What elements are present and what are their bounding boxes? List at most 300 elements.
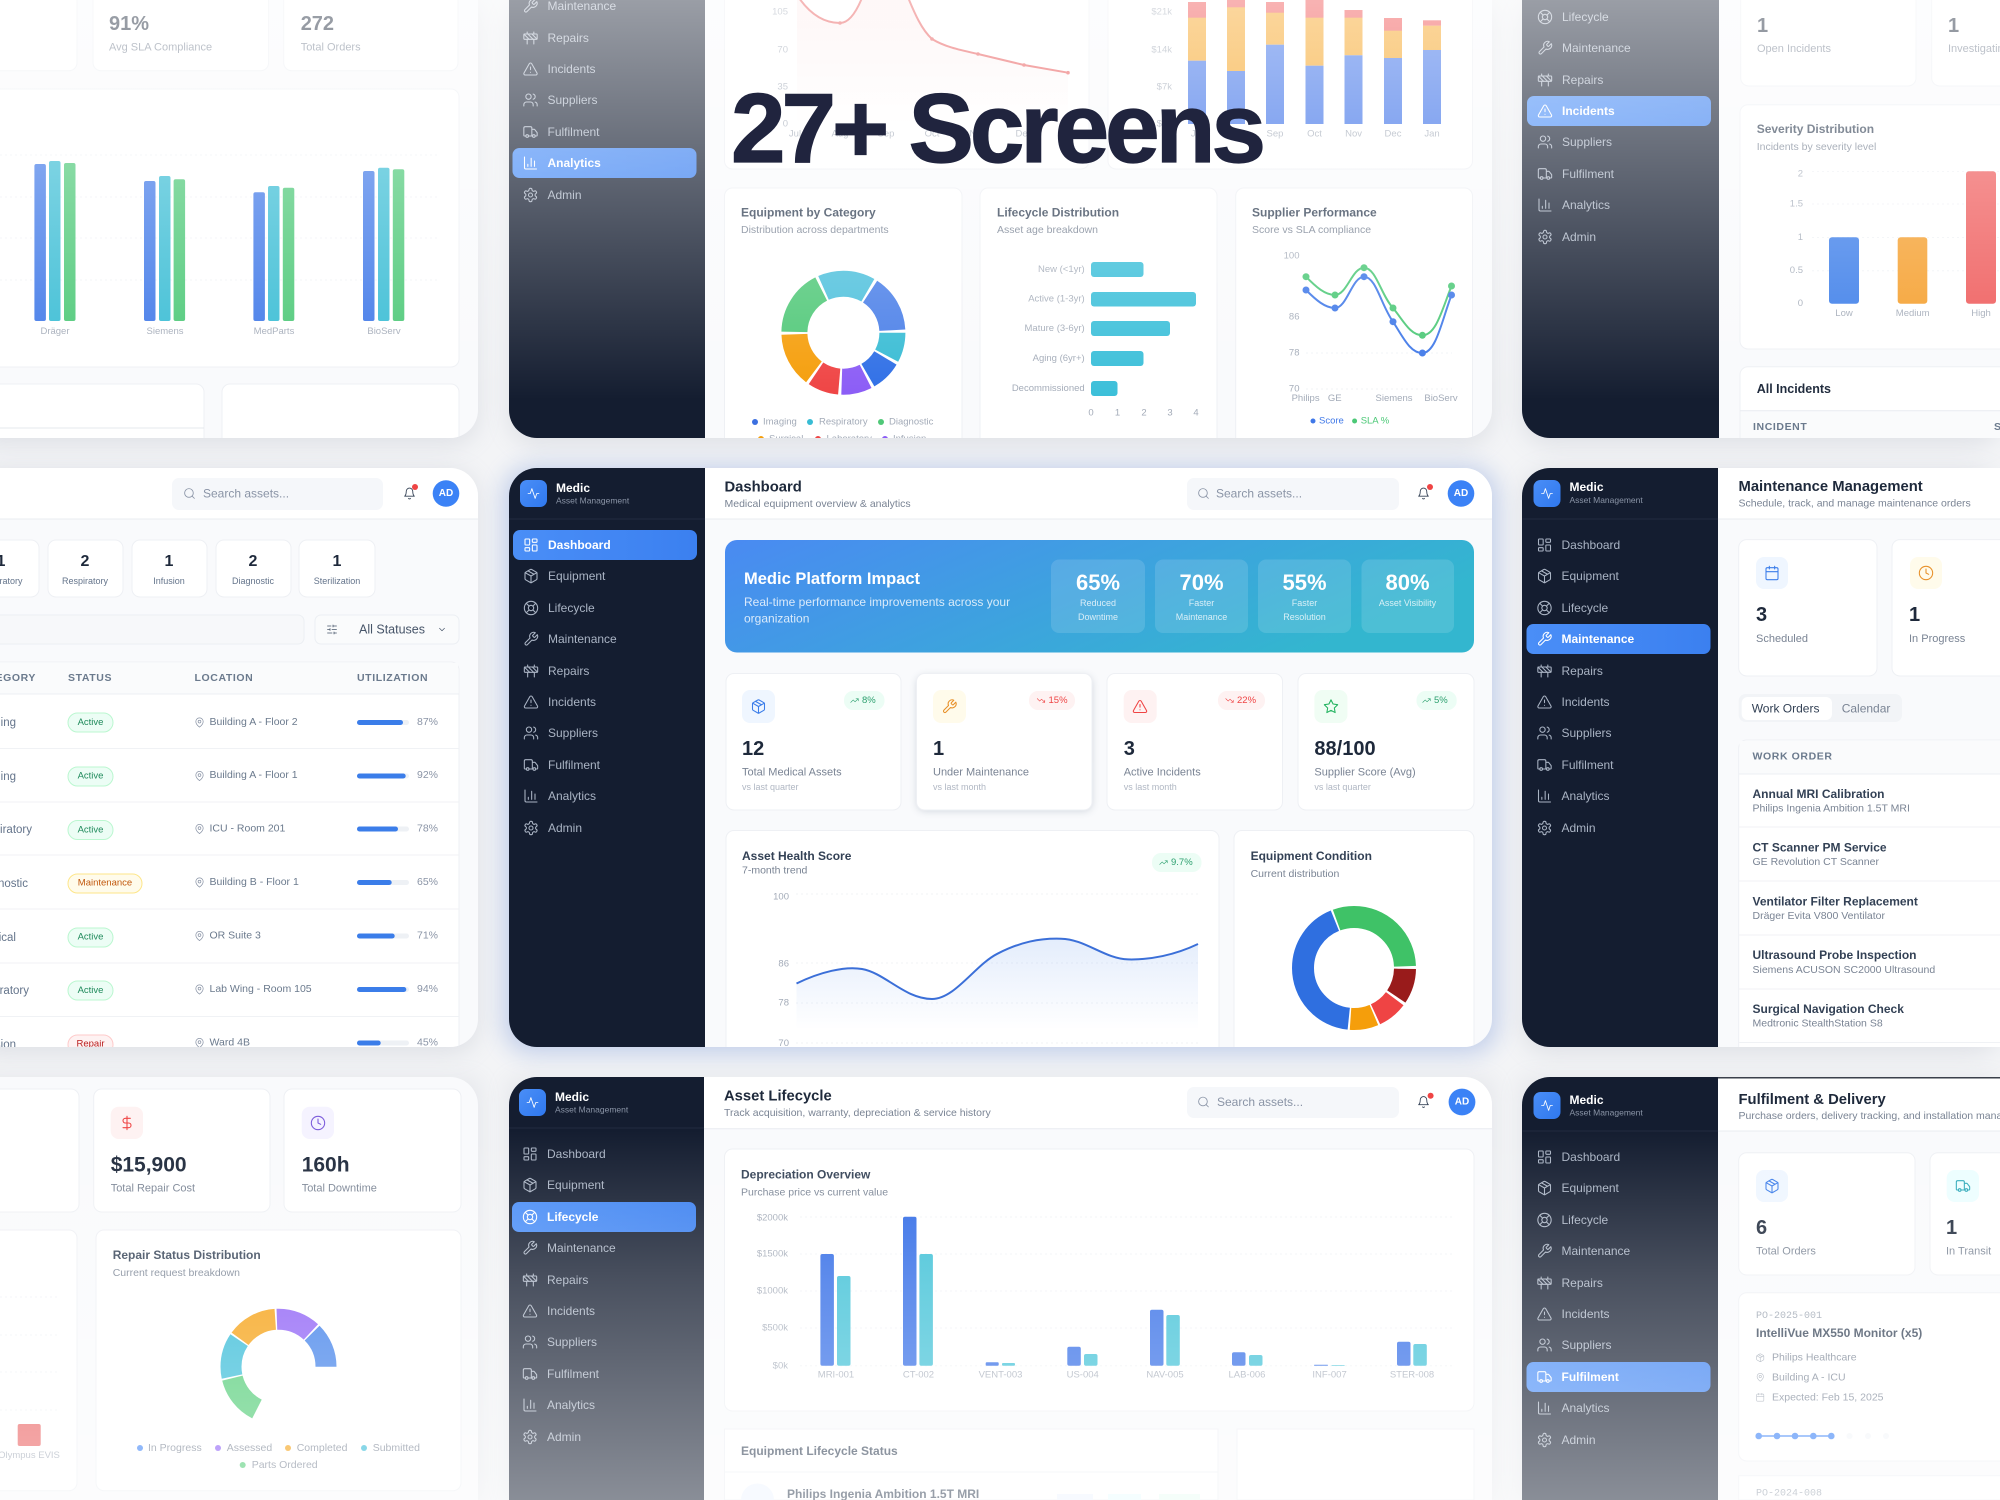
bar group: MedParts [253, 186, 295, 337]
row: Building A Floor 1 [0, 767, 438, 786]
chart panel: downtime trend: Dec [1016, 128, 1033, 140]
chart panel: Asset Health Score: 70 [778, 1038, 789, 1049]
order card: PO-2025-001: IntelliVue MX550 Monitor (x5) [1756, 1326, 1922, 1340]
chart panel: monthly cost stacked bars: Jul [1191, 128, 1203, 140]
order card: PO-2025-001 [1739, 1293, 2000, 1461]
chart panel: monthly cost stacked bars: $21k [1151, 6, 1172, 18]
stat card: In Progress: 1 [1909, 604, 1920, 626]
table: equipment assets: UTILIZATION [357, 672, 428, 684]
nav item: Dashboard active [513, 530, 697, 560]
stat card: Total Repair Cost: $15,900 [111, 1154, 187, 1176]
sidebar: maintenance active [1522, 480, 1718, 835]
chart panel: Depreciation Overview: Purchase price vs current value [741, 1187, 888, 1199]
chart panel: Severity Distribution: 0 [1798, 298, 1803, 309]
legend: equipment condition: Fair [1380, 1046, 1396, 1056]
row: Building A Floor 2: 87% [417, 716, 438, 728]
KPI: Active Incidents: vs last month [1124, 782, 1177, 792]
KPI: Active Incidents: 3 [1124, 738, 1135, 760]
logo [1534, 1092, 1643, 1119]
logo: Asset Management [555, 1104, 629, 1114]
donut chart: equipment by category [794, 284, 892, 382]
stat card: Scheduled [1739, 540, 1877, 676]
category chip: Sterilization: Sterilization [314, 576, 360, 586]
search box: Search assets... [1216, 486, 1302, 500]
stat card: Total Orders: 272 [301, 13, 334, 35]
nav item: Repairs [524, 31, 589, 45]
chart panel: monthly cost stacked bars: Aug [1228, 128, 1244, 140]
bar group: BioServ: BioServ [367, 326, 401, 337]
nav item: Equipment: Equipment [548, 569, 606, 583]
panel: analytics screen top left [0, 0, 478, 464]
row: OR Suite 3: OR Suite 3 [210, 930, 261, 942]
chart panel: Supplier Performance: SLA % [1361, 416, 1390, 426]
nav item: Dashboard: Dashboard [547, 1147, 606, 1161]
table: work orders: WORK ORDER [1752, 751, 1833, 763]
nav item: Fulfilment active: Fulfilment [1562, 1370, 1619, 1384]
nav item: Incidents [523, 1304, 595, 1318]
row: OR Suite 3: Active [78, 932, 103, 942]
nav item: Incidents [1538, 1307, 1610, 1321]
nav item: Fulfilment: Fulfilment [548, 125, 600, 139]
panel: repairs screen bottom left [0, 1077, 478, 1500]
nav item: Lifecycle [1538, 10, 1609, 24]
avatar: AD [1454, 488, 1468, 499]
chart panel: Equipment by Category [724, 208, 962, 438]
table panel: All Incidents: All Incidents [1757, 382, 1831, 396]
KPI: Active Incidents: Active Incidents [1124, 766, 1201, 778]
order card: PO-2024-008: PO-2024-008 [1756, 1488, 1822, 1500]
stat card: Total Repair Cost: Total Repair Cost [111, 1183, 195, 1195]
tabs [1739, 694, 1902, 722]
row: Building B Floor 1 [0, 874, 438, 893]
trend badge: 9.7% [1171, 857, 1193, 868]
panel: incidents screen top right [1522, 0, 2000, 477]
chart panel: Depreciation Overview: $500k [762, 1322, 788, 1334]
chart panel: Asset Health Score [726, 830, 1219, 1070]
order card: PO-2025-001: Philips Healthcare [1772, 1352, 1857, 1364]
stat card: Open Incidents: 1 [1757, 15, 1768, 37]
order card: PO-2024-008 [1739, 1476, 2000, 1500]
chart panel: Depreciation Overview: CT-002 [903, 1370, 934, 1380]
search box [1187, 478, 1399, 510]
avatar [1449, 1089, 1475, 1115]
order card: PO-2025-001: Expected: Feb 15, 2025 [1772, 1391, 1884, 1403]
nav item: Fulfilment: Fulfilment [1562, 758, 1614, 772]
nav item: Incidents [524, 695, 596, 709]
row: ICU Room 201: Active [78, 824, 103, 836]
chart panel: Severity Distribution: High [1971, 308, 1991, 319]
row: Lab Wing Room 105: 94% [417, 983, 438, 995]
chart panel: Lifecycle Distribution: New (<1yr) [1038, 264, 1085, 275]
legend: equipment by category: Laboratory [826, 434, 872, 444]
nav item: Admin: Admin [1562, 821, 1596, 835]
top bar: Fulfilment & Delivery [1738, 1092, 1886, 1108]
row: Building A Floor 2 [0, 713, 438, 732]
filter input [0, 615, 304, 644]
chart panel: Supplier Performance: Score [1319, 416, 1344, 426]
icon: notification bell [1419, 484, 1433, 499]
chart panel: Depreciation Overview: MRI-001 [818, 1370, 854, 1380]
nav item: Analytics active: Analytics [548, 156, 601, 170]
legend: equipment by category: Infusion [893, 434, 926, 444]
chart panel: downtime trend: Aug [832, 128, 848, 140]
logo [1534, 480, 1643, 507]
chart panel: downtime trend: 105 [772, 6, 788, 18]
nav item: Analytics [524, 1398, 595, 1412]
chart panel: Supplier Performance [1236, 208, 1473, 438]
nav item: Incidents active: Incidents [1562, 104, 1615, 118]
chart panel: Depreciation Overview: VENT-003 [979, 1370, 1022, 1380]
nav item: Repairs: Repairs [548, 664, 589, 678]
row: Lab Wing Room 105 [0, 981, 438, 1000]
top bar [705, 468, 1492, 519]
nav item: Repairs: Repairs [1562, 1276, 1603, 1290]
chart panel: Supplier Performance: 78 [1289, 348, 1300, 358]
nav item: Admin [1539, 230, 1596, 244]
chart panel: Equipment by Category: Distribution across departments [741, 224, 889, 236]
chart panel: Depreciation Overview: $1500k [757, 1248, 788, 1260]
table panel: All Incidents: INCIDENT [1753, 421, 1807, 433]
stat card: Total Orders: Total Orders [1756, 1246, 1816, 1258]
logo [519, 1089, 629, 1116]
row: Annual MRI Calibration: Annual MRI Calibration [1752, 787, 1884, 801]
chart panel: monthly cost stacked bars: $7k [1157, 82, 1172, 92]
chart panel: Lifecycle Distribution: Lifecycle Distribution [997, 206, 1119, 220]
nav item: Suppliers: Suppliers [1562, 726, 1612, 740]
sidebar: analytics active [512, 0, 696, 202]
bar group: Siemens: Siemens [147, 326, 184, 337]
nav item: Admin: Admin [1562, 1433, 1596, 1447]
nav item: Incidents: Incidents [548, 695, 596, 709]
order card: PO-2025-001: PO-2025-001 [1756, 1311, 1822, 1322]
bars: purchase price [820, 1217, 1410, 1366]
KPI: Total Medical Assets: 8% [862, 695, 876, 706]
metric: 70% Faster Maintenance [1155, 560, 1248, 633]
stat card: Avg SLA Compliance: Avg SLA Compliance [109, 42, 212, 54]
row: Building A Floor 2: Active [78, 717, 103, 728]
avatar [433, 480, 459, 507]
KPI: Supplier Score: 5% [1434, 695, 1448, 706]
panel: right lower empty [1237, 1429, 1474, 1500]
chart panel: Equipment Condition: Equipment Condition [1251, 849, 1372, 863]
row: OR Suite 3 [0, 928, 438, 947]
nav item: Admin [1538, 1433, 1596, 1447]
row: Ventilator Filter Replacement: Ventilator Filter Replacement [1752, 895, 1918, 909]
logo: Medic [556, 481, 590, 495]
nav item: Incidents [524, 62, 596, 76]
metric: 55% Faster Resolution: Faster [1292, 598, 1317, 608]
banner description: organization [744, 612, 809, 626]
chart panel: Depreciation Overview: NAV-005 [1146, 1370, 1184, 1380]
status filter dropdown: All Statuses [359, 622, 425, 636]
row: ICU Room 201: 78% [417, 822, 438, 834]
metric: 55% Faster Resolution: Resolution [1283, 612, 1326, 622]
nav item: Repairs [523, 1273, 588, 1287]
nav item: Analytics: Analytics [1562, 789, 1610, 803]
nav item: Suppliers [524, 93, 598, 107]
chart panel: downtime trend: 0 [783, 118, 788, 130]
panel: lower right [222, 384, 460, 438]
chart panel: Severity Distribution: 2 [1798, 168, 1803, 180]
chart panel: Asset Health Score: Asset Health Score [742, 849, 852, 863]
chart panel: Depreciation Overview: $2000k [757, 1212, 788, 1224]
nav item: Admin: Admin [547, 1430, 581, 1444]
nav item: Fulfilment [1538, 758, 1614, 772]
nav item: Incidents: Incidents [547, 1304, 595, 1318]
stat card: Scheduled: Scheduled [1756, 633, 1808, 645]
legend: equipment by category: Surgical [769, 434, 803, 444]
table: equipment assets [0, 662, 459, 1082]
chart panel: Severity Distribution: 1.5 [1790, 198, 1803, 210]
nav item: Lifecycle: Lifecycle [1562, 10, 1609, 24]
nav item: Repairs: Repairs [548, 31, 589, 45]
chart panel: Asset Health Score: 7-month trend [742, 864, 808, 876]
nav item: Admin: Admin [548, 188, 582, 202]
table: equipment assets: STATUS [68, 672, 112, 684]
stat card: Avg SLA Compliance [109, 16, 212, 53]
nav item: Incidents [1538, 695, 1610, 709]
metric: 65% Reduced Downtime: 65% [1076, 570, 1120, 595]
nav item: Lifecycle: Lifecycle [548, 601, 595, 615]
chart panel: monthly cost stacked bars: Sep [1267, 128, 1283, 140]
nav item: Fulfilment active [1526, 1362, 1710, 1392]
row: Annual MRI Calibration: Philips Ingenia Ambition 1.5T MRI [1752, 803, 1910, 815]
nav item: Admin: Admin [1562, 230, 1596, 244]
sidebar: incidents active [1527, 10, 1711, 244]
chart panel: Supplier Performance: Philips [1292, 393, 1320, 404]
chart panel: Supplier Performance: 100 [1284, 250, 1300, 262]
tabs: Calendar [1842, 702, 1890, 716]
category chip: Sterilization [299, 540, 375, 597]
row: Ultrasound Probe Inspection [1752, 948, 1935, 976]
top bar [1718, 468, 2000, 519]
chart panel: Equipment Condition [1234, 830, 1474, 1070]
nav item: Fulfilment [523, 126, 600, 138]
bar group: Dräger: Dräger [40, 326, 70, 337]
avatar: AD [439, 488, 453, 499]
nav item: Admin [1538, 821, 1596, 835]
stat card: Total Downtime [284, 1089, 461, 1212]
nav item: Incidents active [1527, 96, 1711, 126]
nav item: Analytics [1538, 1401, 1610, 1415]
stat card: In Transit [1930, 1153, 2000, 1275]
chart panel: Lifecycle Distribution: 1 [1115, 408, 1120, 418]
row: CT Scanner PM Service [1752, 841, 1887, 868]
bar group: Dräger [34, 161, 76, 337]
metric: 80% Asset Visibility: 80% [1385, 570, 1430, 595]
nav item: Maintenance: Maintenance [1562, 1244, 1631, 1258]
nav item: Suppliers: Suppliers [547, 1335, 597, 1349]
chart panel: Supplier Performance: Score vs SLA compliance [1252, 224, 1371, 236]
nav item: Lifecycle active [512, 1202, 696, 1232]
nav item: Equipment: Equipment [1562, 569, 1620, 583]
row: Ward 4B [0, 1035, 438, 1054]
nav item: Lifecycle [524, 601, 595, 615]
row: Ventilator Filter Replacement [1752, 895, 1918, 922]
nav item: Equipment: Equipment [547, 1178, 605, 1192]
category chip: Respiratory [48, 540, 123, 597]
bar group: MedParts: MedParts [254, 326, 295, 337]
chart panel: Lifecycle Distribution: Asset age breakdown [997, 224, 1098, 236]
avatar: AD [1455, 1096, 1469, 1108]
stat card: left partial [0, 1089, 79, 1212]
chart panel: Lifecycle Distribution: Decommissioned [1012, 383, 1085, 394]
donut chart: equipment condition [1303, 917, 1405, 1019]
row: Ward 4B: 45% [417, 1036, 438, 1048]
chart panel: monthly cost stacked bars: Jan [1424, 128, 1440, 140]
nav item: Repairs [1538, 73, 1603, 87]
row: Ultrasound Probe Inspection: Siemens ACUSON SC2000 Ultrasound [1752, 964, 1935, 976]
chart panel: monthly cost stacked bars [1152, 0, 1441, 138]
nav item: Admin [525, 821, 582, 835]
row: OR Suite 3: 71% [417, 930, 438, 942]
chart panel: Supplier Performance: GE [1328, 393, 1342, 404]
category chip: Infusion [132, 540, 207, 597]
stat card: Total Orders [301, 16, 360, 50]
legend: equipment condition: Excellent [1271, 1046, 1310, 1056]
KPI: Supplier Score: vs last quarter [1314, 782, 1371, 792]
legend: equipment by category: Imaging [763, 416, 797, 428]
chart panel: monthly cost stacked bars: $0k [1157, 118, 1172, 130]
nav item: Lifecycle active: Lifecycle [547, 1210, 599, 1224]
nav item: Dashboard active: Dashboard [548, 538, 611, 552]
stat card: Total Downtime: Total Downtime [302, 1183, 377, 1195]
nav item: Admin: Admin [548, 821, 582, 835]
sidebar: fulfilment active [1522, 1092, 1718, 1447]
row: Surgical Navigation Check [1752, 1002, 1904, 1030]
KPI: Supplier Score [1298, 674, 1474, 810]
row: Lab Wing Room 105: Lab Wing - Room 105 [210, 983, 312, 995]
chart panel: downtime trend: Oct [925, 128, 940, 140]
avatar [1448, 480, 1474, 507]
metric: 80% Asset Visibility: Asset Visibility [1379, 598, 1437, 608]
chart panel: Depreciation Overview: US-004 [1067, 1370, 1099, 1380]
nav item: Suppliers [523, 1335, 597, 1349]
chart panel: downtime trend: Sep [878, 128, 894, 140]
row: Building A Floor 1: Building A - Floor 1 [210, 769, 298, 781]
row: Building A Floor 1: Active [78, 770, 103, 782]
table panel: All Incidents [1740, 367, 2000, 477]
bar group: Siemens [144, 176, 185, 337]
banner: Medic Platform Impact [725, 540, 1474, 652]
legend: equipment condition: Poor [1424, 1046, 1444, 1056]
category chip: Respiratory: Respiratory [62, 576, 109, 586]
table: equipment assets: LOCATION [194, 672, 253, 684]
nav item: Suppliers: Suppliers [1562, 135, 1612, 149]
logo: Medic [555, 1090, 589, 1104]
top bar: Maintenance Management [1738, 479, 1923, 495]
row: Building A Floor 2: Building A - Floor 2 [210, 716, 298, 728]
title: 27+ Screens [731, 73, 1266, 183]
nav item: Repairs [1538, 664, 1603, 678]
chart panel: Depreciation Overview: $1000k [757, 1286, 788, 1296]
category chip: Infusion: Infusion [153, 576, 185, 586]
nav item: Analytics active [512, 148, 696, 178]
panel: Equipment Lifecycle Status [724, 1429, 1218, 1500]
panel: dashboard screen center [509, 468, 1492, 1070]
chart panel: Lifecycle Distribution: Aging (6yr+) [1033, 353, 1085, 364]
category chip: Respiratory: 2 [81, 553, 90, 570]
top bar [704, 1077, 1492, 1129]
chart panel: Lifecycle Distribution: 4 [1193, 408, 1199, 418]
KPI: Under Maintenance: vs last month [933, 782, 986, 792]
stat card: In Transit: In Transit [1946, 1246, 1991, 1258]
nav item: Fulfilment [1538, 168, 1614, 180]
chart panel: downtime trend: 70 [777, 44, 788, 56]
panel: lower left [0, 384, 204, 438]
nav item: Suppliers: Suppliers [548, 93, 598, 107]
chart panel: Severity Distribution: Medium [1896, 308, 1930, 319]
icon: notification bell [405, 484, 418, 499]
legend: equipment condition: Good [1335, 1046, 1358, 1056]
search box [172, 478, 383, 510]
KPI: Active Incidents [1107, 674, 1282, 810]
stat card: Total Orders [1739, 1153, 1915, 1275]
logo: Asset Management [1570, 495, 1643, 505]
chart panel: monthly cost stacked bars: Oct [1307, 128, 1322, 140]
chart panel: Asset Health Score: 86 [778, 958, 789, 970]
row: Building B Floor 1: Maintenance [78, 878, 132, 888]
chart panel: Depreciation Overview [724, 1149, 1474, 1411]
metric: 80% Asset Visibility [1362, 560, 1454, 633]
metric: 70% Faster Maintenance: Maintenance [1176, 612, 1227, 622]
panel: equipment list screen middle left [0, 468, 478, 1082]
panel: fulfilment screen bottom right [1522, 1077, 2000, 1500]
nav item: Maintenance active: Maintenance [1562, 632, 1635, 646]
KPI: Under Maintenance [916, 674, 1092, 811]
nav item: Repairs [1538, 1276, 1603, 1290]
logo: Asset Management [556, 496, 630, 506]
nav item: Repairs [524, 664, 589, 678]
heading: Dashboard: Dashboard [724, 480, 802, 496]
stat card: Open Incidents: Open Incidents [1757, 43, 1831, 55]
legend: repair status: Parts Ordered [252, 1459, 318, 1471]
stat card: Total Downtime: 160h [302, 1154, 350, 1176]
category chip: Sterilization: 1 [333, 553, 342, 570]
legend: equipment by category: Diagnostic [889, 416, 934, 428]
row: Surgical Navigation Check: Surgical Navigation Check [1752, 1002, 1904, 1016]
logo: Medic [1570, 1093, 1604, 1107]
nav item: Incidents: Incidents [1562, 695, 1610, 709]
category chip: Laboratory [0, 540, 39, 597]
chart panel: Equipment Condition: Current distribution [1251, 868, 1339, 880]
row: Building B Floor 1: Building B - Floor 1 [210, 876, 299, 888]
chart panel: Depreciation Overview: LAB-006 [1229, 1370, 1265, 1380]
KPI: Total Medical Assets: vs last quarter [742, 782, 799, 792]
chart panel: Supplier Performance: BioServ [1424, 393, 1458, 404]
chart panel: Asset Health Score: 78 [778, 998, 789, 1008]
KPI: Under Maintenance: 15% [1048, 695, 1068, 706]
nav item: Maintenance: Maintenance [547, 1241, 616, 1255]
chart panel: Depreciation Overview: STER-008 [1390, 1370, 1434, 1380]
delivery progress tracker [1755, 1433, 1889, 1439]
nav item: Suppliers [1538, 135, 1612, 149]
stat card: Scheduled: 3 [1756, 604, 1767, 626]
nav item: Suppliers [1538, 726, 1612, 740]
nav item: Dashboard: Dashboard [1562, 1150, 1620, 1164]
nav item: Lifecycle [1538, 601, 1609, 615]
stat card: Investigating [1949, 18, 2000, 54]
panel: Equipment Lifecycle Status: Equipment Lifecycle Status [741, 1444, 898, 1458]
nav item: Lifecycle: Lifecycle [1562, 1213, 1609, 1227]
order card: PO-2025-001: Building A - ICU [1772, 1371, 1846, 1383]
sidebar: dashboard active [509, 480, 705, 835]
stat card: In Progress [1892, 540, 2000, 676]
chart panel: Lifecycle Distribution: 3 [1167, 408, 1173, 418]
logo [520, 480, 630, 507]
chart panel: repair cost by equipment [0, 1230, 77, 1491]
chart panel: monthly cost stacked bars: Nov [1345, 128, 1362, 140]
